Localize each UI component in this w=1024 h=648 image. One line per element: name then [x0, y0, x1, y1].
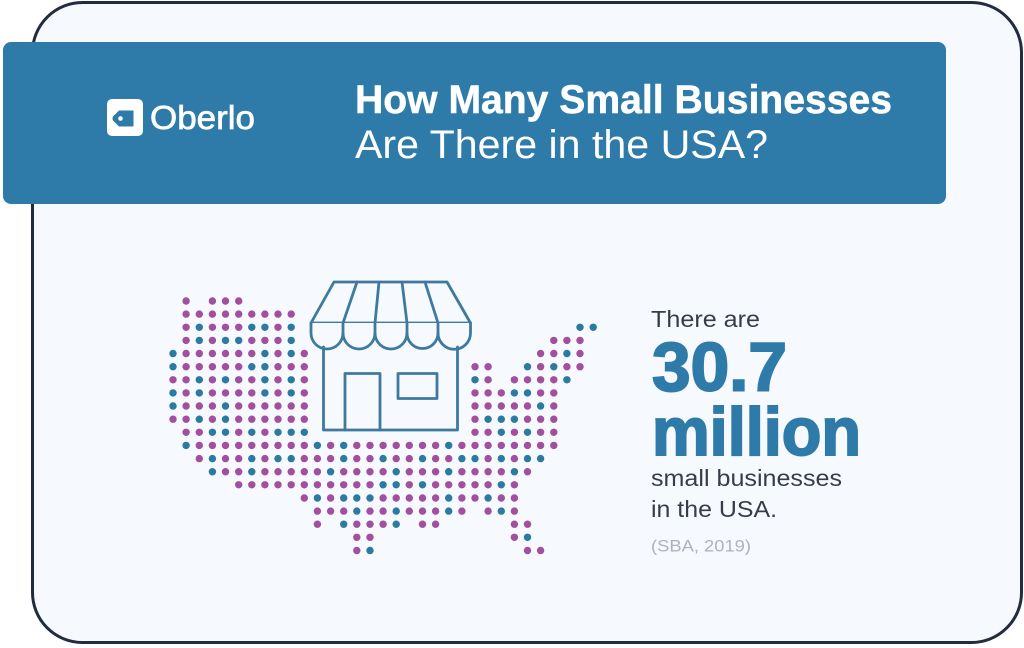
- big number: 30.7: [652, 328, 787, 406]
- big unit: million: [652, 394, 861, 470]
- description: small businesses: [651, 465, 842, 491]
- chart: dotted USA map: [169, 297, 597, 554]
- description line 2: in the USA.: [651, 496, 777, 522]
- icon: storefront: [311, 282, 470, 430]
- text block: statistic: There are: [651, 306, 760, 332]
- title: How Many Small Businesses: [355, 78, 892, 122]
- text block: statistic: [651, 306, 861, 556]
- title: Are There in the USA?: [355, 123, 768, 167]
- icon: Oberlo logo: [107, 99, 143, 136]
- source: (SBA, 2019): [651, 538, 751, 556]
- panel: title banner: [3, 42, 946, 204]
- title: [355, 78, 892, 167]
- logo wordmark: Oberlo: [150, 99, 255, 136]
